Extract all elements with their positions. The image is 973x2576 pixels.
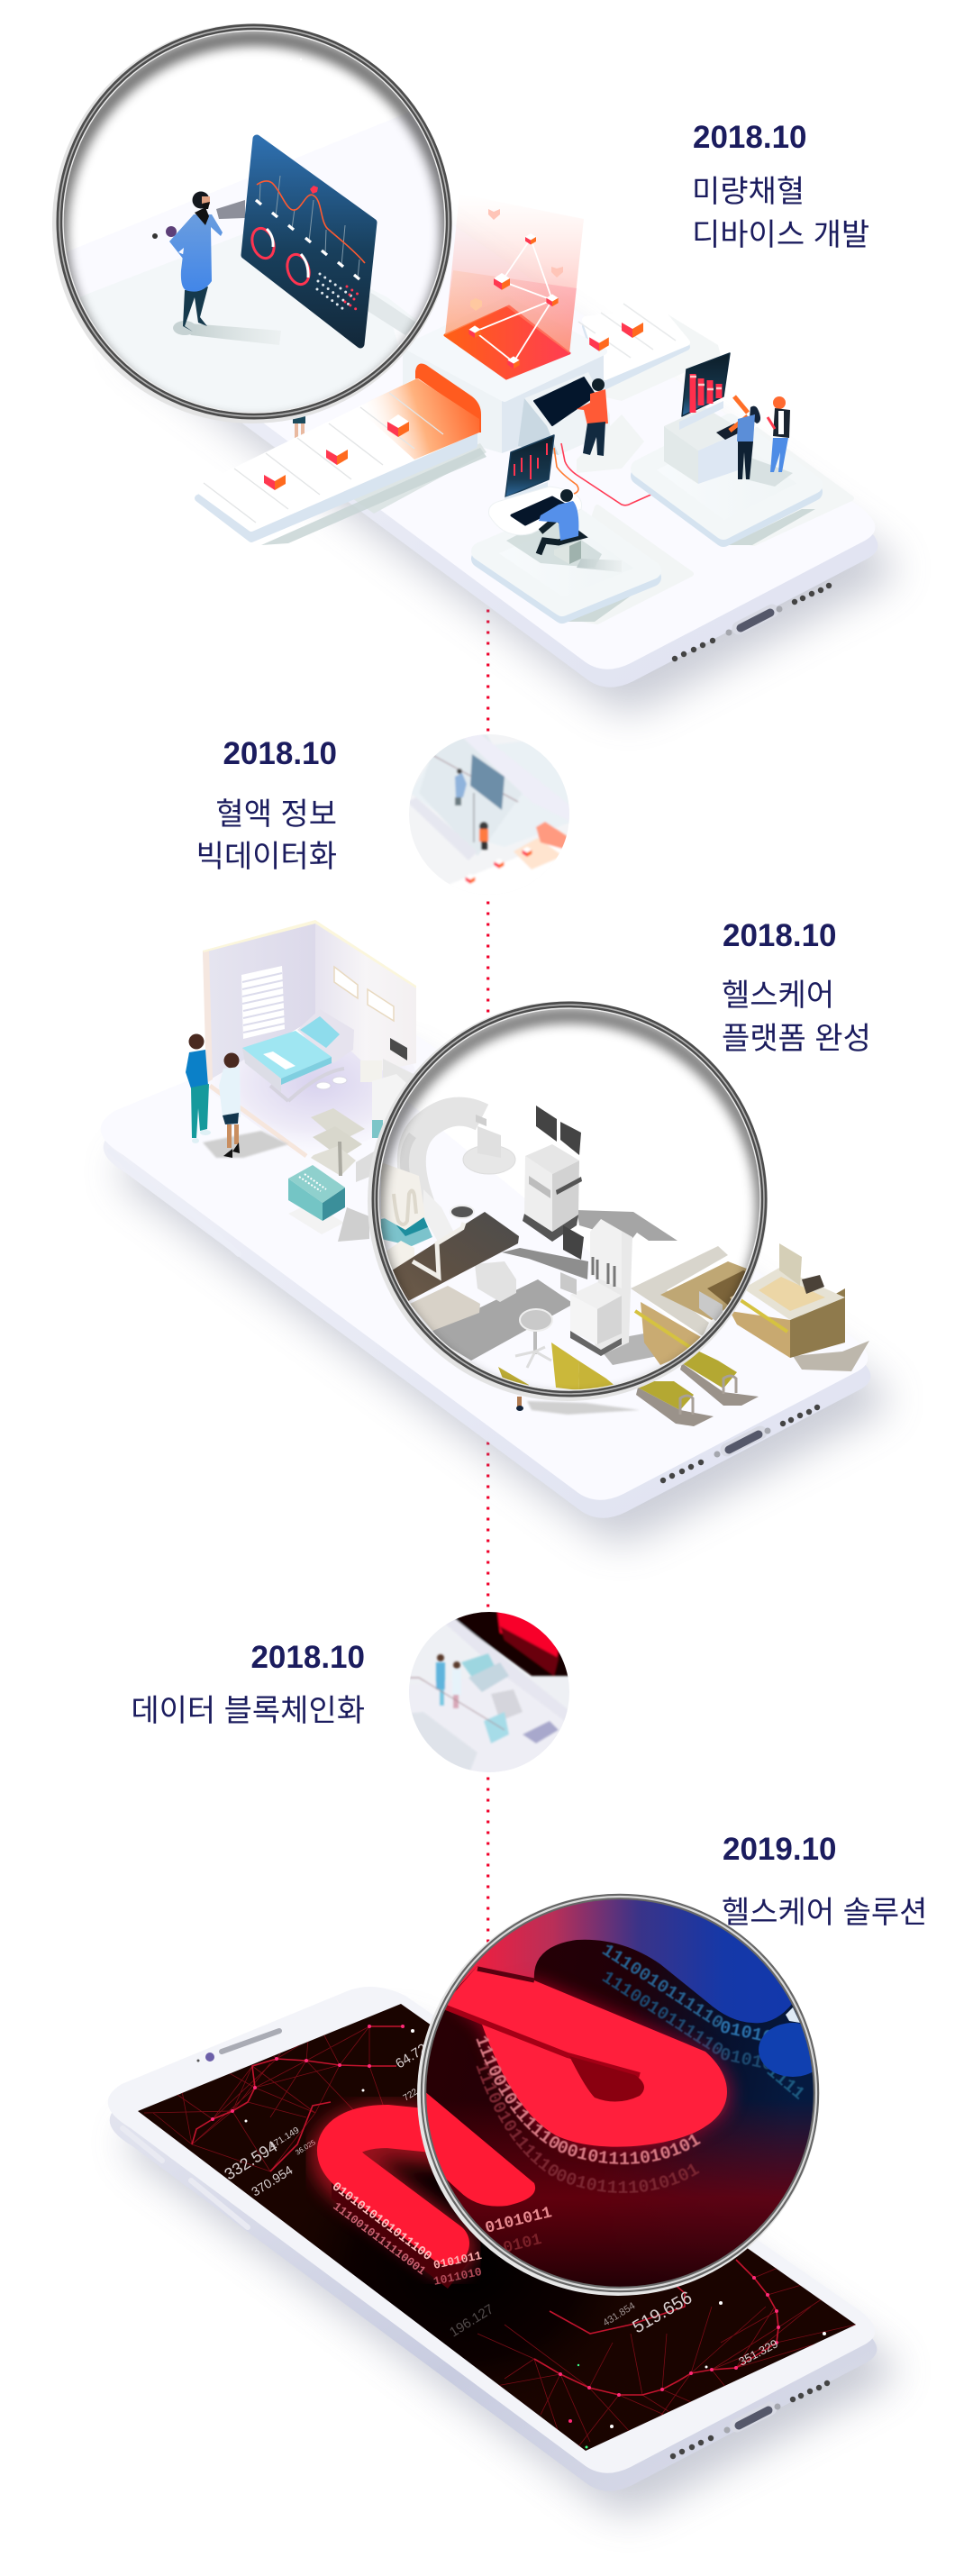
top red to blue surface: [450, 1897, 793, 2023]
platform: left workstation: [480, 507, 691, 622]
blue digits: 010101: [718, 2017, 786, 2052]
people shadows: [203, 1131, 288, 1158]
control console and person: [518, 372, 644, 473]
text: 2018.10 blood big data: 혈액 정보: [215, 797, 337, 832]
reception desk outside lens: [730, 1243, 869, 1371]
small person behind lens: [290, 399, 308, 438]
right conveyor: [578, 304, 721, 401]
text: 2018.10 blockchain: [131, 1640, 365, 1728]
data panel: [245, 139, 373, 344]
floor stripe: [210, 1086, 306, 1156]
lens 3: 0101011: [484, 2204, 554, 2238]
cart with monitors: [523, 1106, 582, 1242]
text: 2018.10 platform complete: 플랫폼 완성: [722, 1022, 871, 1056]
text: 2019.10 healthcare solution: [722, 1832, 927, 1930]
red logo shape outside lens: 1110010111110001: [331, 2199, 428, 2278]
numeric labels: 196.127: [447, 2301, 496, 2340]
text: 2018.10 platform complete: 헬스케어: [722, 979, 834, 1013]
side buttons: [123, 2128, 248, 2227]
woman at kiosk: [730, 396, 760, 479]
text: 2018.10 blood big data: 빅데이터화: [196, 840, 337, 874]
column base: [381, 1162, 425, 1230]
man with clipboard: [768, 396, 790, 472]
teal floor: [381, 1218, 432, 1246]
numeric labels: 471.149: [268, 2125, 302, 2152]
phone 2: healthcare platform scene: [101, 920, 887, 1543]
belt opening: [415, 364, 481, 432]
text: 2018.10 blockchain: 데이터 블록체인화: [131, 1694, 365, 1728]
lower red leg: [423, 2090, 535, 2207]
person in lab coat: [152, 191, 281, 345]
dark stripe: [446, 2007, 640, 2075]
stool: [515, 1309, 552, 1368]
blue digits: 1110010111110: [597, 1941, 727, 2034]
yellow benches: [498, 1343, 614, 1391]
lens 3: [417, 1894, 820, 2296]
wall digits: 111001011111000101111010101: [476, 2035, 701, 2165]
left conveyor belt: [198, 378, 486, 545]
red logo shape outside lens: 1011010: [432, 2265, 483, 2289]
text: 2018.10 blood big data: [196, 736, 337, 874]
phone 3: healthcare solution: [108, 1987, 895, 2514]
main red letterform: [446, 1966, 727, 2147]
seated operator station: [488, 435, 582, 564]
wall digits: 111001011111000101111010101: [476, 2062, 700, 2193]
window blinds: [241, 966, 285, 1039]
machine edge in lens: [356, 324, 468, 432]
numeric labels: 36.025: [294, 2138, 317, 2157]
blue digits: 010101: [718, 2044, 786, 2079]
wires: [554, 443, 655, 505]
teardrop hole: [569, 2056, 644, 2102]
teal monitor box: [288, 1165, 369, 1242]
hologram: [445, 194, 584, 369]
anesthesia machine: [560, 1219, 632, 1356]
text: 2018.10 blood big data: 2018.10: [223, 736, 337, 771]
numeric labels: 519.656: [629, 2288, 696, 2337]
numeric labels: 370.954: [249, 2162, 296, 2199]
equipment behind lens: [360, 1038, 419, 1138]
text: 2018.10 platform complete: [722, 918, 871, 1056]
text: 2018.10 blockchain: 2018.10: [250, 1640, 365, 1675]
hospital bed: [242, 1009, 354, 1101]
C-arm: [405, 1112, 515, 1248]
inner lens shadow: [375, 1015, 764, 1405]
lens 2: [360, 1001, 775, 1406]
woman in blue: [186, 1034, 211, 1143]
lens ring: [423, 1897, 816, 2289]
numeric labels: 351.329: [736, 2336, 780, 2369]
orange square: [445, 306, 569, 378]
lens ring: [375, 1005, 764, 1394]
red logo shape outside lens: 0101011: [432, 2249, 483, 2272]
text: 2019.10 healthcare solution: 2019.10: [723, 1832, 837, 1867]
lens 1: [52, 23, 468, 432]
blue digits: [597, 1941, 808, 2105]
red logo shape outside lens: [329, 2126, 483, 2289]
inner lens shadow: [59, 38, 449, 427]
numeric labels: 722.1: [402, 2083, 426, 2104]
phone surface in lens: [54, 90, 459, 432]
speaker and camera: [196, 2031, 279, 2062]
dotted timeline: [486, 598, 489, 1944]
room: [203, 920, 432, 1162]
lens 3: 0101: [502, 2231, 544, 2258]
numeric labels: [222, 2037, 780, 2369]
blue digits: 1110010111110: [597, 1968, 727, 2062]
network mesh: [144, 2009, 856, 2449]
blue digits: 1111: [762, 2062, 808, 2105]
doctor: [219, 1052, 241, 1158]
small circle 2: [409, 1612, 569, 1772]
magnified platform: [54, 230, 468, 432]
numeric labels: 64.729: [393, 2037, 436, 2071]
supply cart: [311, 1108, 383, 1182]
side buttons: [110, 1151, 239, 1254]
small circle 1: [409, 734, 569, 894]
reception desk in lens: [631, 1246, 748, 1365]
screen: [126, 1991, 874, 2460]
boxes on belt: [264, 315, 643, 490]
text: 2018.10 device development: 미량채혈: [692, 175, 805, 209]
text: 2018.10 device development: 2018.10: [693, 120, 807, 155]
phone 1: development device scene: [108, 183, 895, 712]
text: 2018.10 device development: [692, 120, 869, 252]
benches outside lens: [516, 1349, 759, 1426]
bright network curves: [192, 2026, 778, 2395]
text: 2018.10 platform complete: 2018.10: [723, 918, 837, 953]
red logo shape outside lens: 0101010101011100: [329, 2180, 434, 2264]
operating table: [393, 1205, 519, 1331]
glow: [453, 1980, 731, 2147]
text: 2018.10 device development: 디바이스 개발: [692, 218, 869, 252]
text: 2019.10 healthcare solution: 헬스케어 솔루션: [722, 1896, 927, 1930]
numeric labels: 431.854: [601, 2300, 637, 2329]
platform: right kiosk: [640, 353, 851, 545]
lens ring: [59, 27, 449, 416]
machine: [403, 300, 604, 453]
floor shadows: [432, 1279, 574, 1361]
numeric labels: 332.594: [222, 2137, 280, 2183]
blue blob: [759, 2023, 827, 2077]
